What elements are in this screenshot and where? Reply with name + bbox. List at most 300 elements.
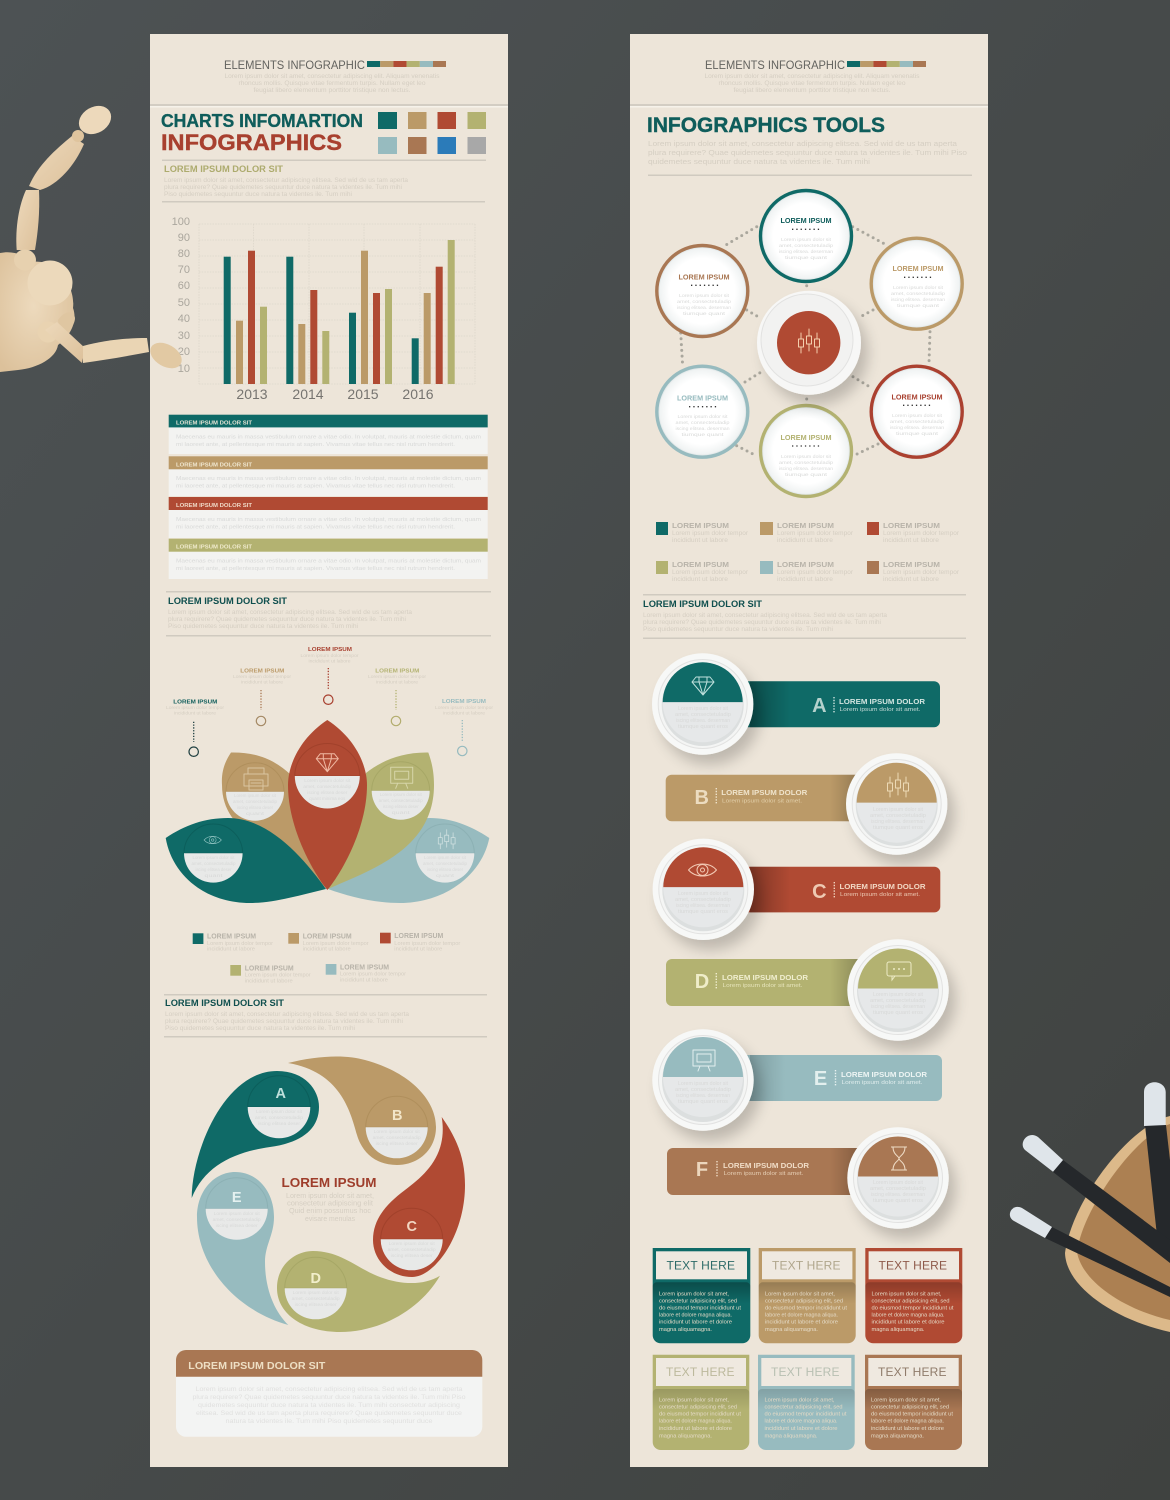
section heading: lotus: plura requirere? Quae quidemetes sequuntur duce natura ta videntes ile. Tum mihi — [168, 617, 406, 623]
hexagon legend: Lorem ipsum dolor tempor — [777, 570, 853, 576]
lotus legend: incididunt ut labore — [245, 978, 293, 984]
row A: tiumque quant eros — [678, 724, 729, 730]
text box: brown: do eiusmod tempor incididunt ut — [871, 1412, 953, 1418]
circle: light blue — [657, 366, 748, 457]
hexagon legend: incididunt ut labore — [883, 577, 940, 583]
bar chart: 100 — [172, 216, 190, 228]
text box: red — [865, 1248, 962, 1343]
text box: brown: incididunt ut labore et dolore — [871, 1426, 944, 1432]
petal text: amet, consectetuladip — [303, 784, 352, 789]
swirl chart — [192, 1056, 465, 1332]
lotus legend — [193, 933, 461, 984]
text box: brown: consectetur adipisicing elit, sed — [871, 1405, 949, 1411]
swirl segment E — [197, 1172, 288, 1325]
hexagon legend: Lorem ipsum dolor tempor — [883, 570, 959, 576]
hexagon legend: Lorem ipsum dolor tempor — [672, 531, 748, 537]
bar chart: 2016 — [402, 386, 434, 402]
bar chart: 20 — [178, 346, 190, 358]
circle: red: LOREM IPSUM — [892, 392, 942, 402]
bar chart: 60 — [178, 280, 190, 292]
text box: tan — [759, 1248, 856, 1343]
intro text block: LOREM IPSUM DOLOR SIT — [164, 164, 284, 174]
bar chart: 2014 — [292, 386, 324, 402]
text box: teal: do eiusmod tempor incididunt ut — [659, 1306, 741, 1312]
row A: LOREM IPSUM DOLOR — [839, 697, 926, 706]
row D: D — [695, 971, 709, 993]
lotus labels and pointers — [166, 647, 493, 756]
petal text: Lorem ipsum dolor sit — [424, 855, 467, 860]
circle: teal: LOREM IPSUM — [780, 216, 832, 225]
text box: brown: magna aliquamagna. — [871, 1433, 924, 1439]
petal text: amet, consectetuladip — [379, 798, 423, 803]
circle: olive: iscing elitsea. deserman — [779, 466, 833, 472]
row B: tiumque quant eros — [873, 825, 924, 831]
row D — [666, 939, 949, 1041]
section heading: rows: LOREM IPSUM DOLOR SIT — [643, 599, 762, 610]
circle: teal: Lorem ipsum dolor sit — [781, 237, 832, 243]
colour text bars: LOREM IPSUM DOLOR SIT — [176, 420, 253, 426]
wooden mannequin — [0, 100, 186, 374]
callout box: quidemetes sequuntur duce natura ta videntes ile. Tum mihi consectetur adipiscing — [198, 1402, 461, 1409]
row D: tiumque quant eros — [873, 1010, 924, 1016]
circle: olive — [760, 406, 852, 496]
swirl segment C: Lorem ipsum dolor sit — [389, 1241, 435, 1246]
row C: C — [812, 881, 827, 903]
colour text bars — [169, 415, 488, 579]
swirl segment D — [277, 1251, 440, 1332]
row C: tiumque quant eros — [678, 909, 729, 915]
colour text bars: Maecenas eu mauris in massa vestibulum ornare a vitae odio. In volutpat, mauris at molestie dictum, quam — [176, 558, 481, 564]
poster header: feugiat libero elementum porttitor tristique non lectus. — [734, 88, 891, 94]
swirl segment A: Lorem ipsum dolor sit — [256, 1109, 303, 1114]
row C: amet, consectetuladip — [675, 897, 731, 903]
row E: Lorem ipsum dolor sit amet. — [842, 1080, 923, 1086]
row B: iscing elitsea. deserman — [871, 819, 925, 825]
hexagon legend: LOREM IPSUM — [883, 523, 940, 530]
row E — [652, 1029, 942, 1131]
circle: brown: amet, consectetuladip — [677, 299, 731, 305]
bar chart: 2015 — [347, 386, 379, 402]
title: CHARTS INFOMARTION — [161, 111, 363, 131]
lotus labels and pointers: LOREM IPSUM — [375, 668, 419, 674]
text box: light blue: incididunt ut labore et dolore — [764, 1426, 838, 1432]
row E: tiumque quant eros — [678, 1099, 729, 1105]
section heading: lotus: LOREM IPSUM DOLOR SIT — [168, 596, 287, 607]
swirl segment D: Lorem ipsum dolor sit — [293, 1290, 339, 1295]
row E: amet, consectetuladip — [675, 1087, 731, 1093]
petal text: iscing elitsea deser — [427, 867, 463, 872]
title: plura requirere? Quae quidemetes sequuntur duce natura ta videntes ile. Tum mihi Piso — [648, 148, 967, 157]
text box: light blue: labore et dolore magna aliqua. — [764, 1419, 838, 1425]
bar chart: 30 — [178, 330, 190, 342]
row B — [666, 753, 947, 855]
lotus labels and pointers: incididunt ut labore — [308, 658, 351, 664]
lotus labels and pointers: Lorem ipsum dolor tempor — [368, 674, 426, 680]
lotus labels and pointers: LOREM IPSUM — [308, 647, 352, 653]
lotus legend: incididunt ut labore — [340, 978, 388, 984]
swirl segment E: Lorem ipsum dolor sit — [214, 1211, 260, 1216]
poster header: rhoncus mollis. Quisque vitae fermentum turpis. Nullam eget leo — [238, 81, 426, 87]
swirl segment A: iscing elitsea deser — [258, 1121, 301, 1126]
swirl segment B: B — [392, 1108, 403, 1124]
row B: B — [694, 787, 709, 809]
colour text bars: mi laoreet ante, at pellentesque mi mauris at sapien. Vivamus vitae tellus nec nisl rutrum hendrerit. — [176, 524, 456, 530]
row F — [667, 1127, 949, 1229]
circle: teal: iscing elitsea. deserman — [779, 249, 833, 255]
bar chart: 70 — [178, 264, 190, 276]
row E: iscing elitsea. deserman — [676, 1093, 730, 1099]
swirl segment A: A — [275, 1086, 286, 1102]
colour text bars: Maecenas eu mauris in massa vestibulum ornare a vitae odio. In volutpat, mauris at molestie dictum, quam — [176, 517, 481, 523]
row F: Lorem ipsum dolor sit — [873, 1180, 924, 1186]
colour text bars: LOREM IPSUM DOLOR SIT — [176, 545, 253, 551]
petal text: Lorem ipsum dolor sit — [192, 855, 235, 860]
section heading: rows: plura requirere? Quae quidemetes sequuntur duce natura ta videntes ile. Tum mihi — [643, 620, 881, 626]
bar chart: 2013 — [236, 386, 268, 402]
lotus labels and pointers: LOREM IPSUM — [240, 668, 284, 674]
colour text bars: LOREM IPSUM DOLOR SIT — [176, 503, 253, 509]
circle: olive: Lorem ipsum dolor sit — [781, 454, 832, 460]
row E: E — [814, 1068, 827, 1090]
text box: light blue: do eiusmod tempor incididunt ut — [764, 1412, 847, 1418]
circle: light blue: iscing elitsea. deserman — [676, 426, 730, 432]
circle: tan: amet, consectetuladip — [891, 291, 945, 297]
row A: Lorem ipsum dolor sit amet. — [840, 707, 921, 713]
swirl segment C: iscing elitsea deser — [391, 1253, 433, 1258]
poster header: ELEMENTS INFOGRAPHIC — [705, 58, 845, 72]
petal text: amet, consectetuladip — [192, 861, 236, 866]
text box: teal: TEXT HERE — [666, 1258, 736, 1272]
bar chart: 90 — [178, 232, 190, 244]
hexagon legend: LOREM IPSUM — [672, 523, 729, 530]
circle: tan: tiumque quant — [897, 303, 940, 309]
swirl segment D: amet, consectetuladip — [292, 1296, 340, 1301]
circle: red: tiumque quant — [896, 431, 939, 437]
petal text: Lorem ipsum dolor sit — [234, 793, 277, 798]
panel: right poster — [630, 34, 988, 1467]
swirl segment E: E — [232, 1190, 242, 1206]
circle: brown: iscing elitsea. deserman — [677, 305, 731, 311]
bar chart: 10 — [178, 363, 190, 375]
pencil — [1144, 1082, 1170, 1245]
callout box: elitsea. Sed wid de us tam aperta plura requirere? Quae quidemetes sequuntur duce — [196, 1410, 463, 1417]
hexagon legend — [656, 522, 959, 583]
hexagon legend: incididunt ut labore — [672, 538, 729, 544]
hexagon legend: Lorem ipsum dolor tempor — [777, 531, 853, 537]
pencil — [1023, 1135, 1170, 1263]
callout box: plura requirere? Quae quidemetes sequuntur duce natura ta videntes ile. Tum mihi Piso — [192, 1394, 466, 1401]
petal text: iscing elitsea deser — [196, 867, 232, 872]
lotus labels and pointers: Lorem ipsum dolor tempor — [166, 705, 224, 711]
section heading: swirl: Lorem ipsum dolor sit amet, consectetur adipiscing elitsea. Sed wid de us tam aperta — [165, 1012, 410, 1018]
text box: teal: consectetur adipisicing elit, sed — [659, 1298, 737, 1304]
petal text: iscing elitsea deser — [237, 805, 273, 810]
circle: red: iscing elitsea. deserman — [890, 425, 944, 431]
petal: red — [288, 720, 367, 890]
text box: teal: labore et dolore magna aliqua. — [659, 1313, 732, 1319]
bar chart: 80 — [178, 248, 190, 260]
circle: red — [871, 366, 962, 457]
poster header: feugiat libero elementum porttitor tristique non lectus. — [254, 88, 411, 94]
lotus legend: LOREM IPSUM — [394, 933, 443, 940]
swirl segment B — [288, 1056, 436, 1165]
text box: red: incididunt ut labore et dolore — [872, 1320, 944, 1326]
colour text bars: mi laoreet ante, at pellentesque mi mauris at sapien. Vivamus vitae tellus nec nisl rutrum hendrerit. — [176, 566, 456, 572]
section heading: rows — [643, 594, 966, 639]
hexagon legend: LOREM IPSUM — [883, 562, 940, 569]
text box: light blue: TEXT HERE — [771, 1365, 841, 1379]
text box: teal: magna aliquamagna. — [659, 1327, 712, 1333]
circle: brown: Lorem ipsum dolor sit — [679, 293, 730, 299]
lotus labels and pointers: incididunt ut labore — [174, 710, 216, 716]
colour text bars: mi laoreet ante, at pellentesque mi mauris at sapien. Vivamus vitae tellus nec nisl rutrum hendrerit. — [176, 442, 456, 448]
text box: red: magna aliquamagna. — [872, 1327, 925, 1333]
circle: light blue: tiumque quant — [682, 432, 724, 438]
text box: tan: consectetur adipisicing elit, sed — [765, 1298, 843, 1304]
lotus legend: incididunt ut labore — [207, 946, 255, 952]
petal text: Lorem ipsum dolor sit — [380, 792, 422, 797]
callout box: Lorem ipsum dolor sit amet, consectetur adipiscing elitsea. Sed wid de us tam aperta — [196, 1386, 463, 1393]
text box: red: labore et dolore magna aliqua. — [872, 1313, 945, 1319]
text box: light blue: Lorem ipsum dolor sit amet, — [764, 1398, 835, 1404]
text box: tan: do eiusmod tempor incididunt ut — [765, 1306, 847, 1312]
text box: tan: magna aliquamagna. — [765, 1327, 818, 1333]
row C — [653, 839, 940, 940]
circle: brown: tiumque quant — [683, 311, 726, 317]
row B: Lorem ipsum dolor sit — [873, 807, 924, 813]
swirl segment B: Lorem ipsum dolor sit — [374, 1129, 420, 1134]
hexagon legend: Lorem ipsum dolor tempor — [672, 570, 748, 576]
section heading: swirl: LOREM IPSUM DOLOR SIT — [165, 998, 284, 1009]
hexagon legend: incididunt ut labore — [883, 538, 940, 544]
circle: light blue: LOREM IPSUM — [677, 394, 728, 402]
pencil — [1010, 1207, 1170, 1297]
lotus legend: Lorem ipsum dolor tempor — [340, 972, 406, 978]
lotus legend: Lorem ipsum dolor tempor — [207, 941, 273, 947]
swirl centre text: LOREM IPSUM — [282, 1175, 376, 1190]
circle: light blue: amet, consectetuladip — [676, 420, 730, 426]
row B: Lorem ipsum dolor sit amet. — [722, 798, 802, 804]
lotus chart — [166, 720, 489, 903]
callout box — [176, 1350, 482, 1437]
row D: iscing elitsea. deserman — [871, 1004, 925, 1010]
text box: red: do eiusmod tempor incididunt ut — [872, 1306, 954, 1312]
bar chart: 50 — [178, 297, 190, 309]
petal text: quant — [246, 811, 265, 816]
section heading: rows: Lorem ipsum dolor sit amet, consectetur adipiscing elitsea. Sed wid de us tam aperta — [643, 613, 888, 619]
text box: tan: labore et dolore magna aliqua. — [765, 1313, 838, 1319]
swirl segment E: iscing elitsea deser — [216, 1223, 258, 1228]
circle: teal: amet, consectetuladip — [779, 243, 833, 249]
bar chart: 40 — [178, 313, 190, 325]
lotus labels and pointers: Lorem ipsum dolor tempor — [233, 674, 291, 680]
circle: light blue: Lorem ipsum dolor sit — [678, 414, 728, 420]
row C: Lorem ipsum dolor sit amet. — [840, 892, 920, 898]
text box: teal: Lorem ipsum dolor sit amet, — [659, 1291, 729, 1297]
title: quidemetes sequuntur duce natura ta videntes ile. Tum mihi — [648, 157, 870, 166]
lotus legend: LOREM IPSUM — [303, 934, 352, 940]
poster header: rhoncus mollis. Quisque vitae fermentum turpis. Nullam eget leo — [718, 81, 906, 87]
row F: amet, consectetuladip — [870, 1186, 926, 1192]
hexagon legend: LOREM IPSUM — [672, 562, 729, 569]
petal text: quant — [436, 873, 455, 878]
lotus legend: Lorem ipsum dolor tempor — [303, 941, 369, 947]
swirl segment C: C — [406, 1219, 417, 1235]
section heading: lotus: Piso quidemetes sequuntur duce natura ta videntes ile. Tum mihi — [168, 624, 358, 630]
circle: brown: LOREM IPSUM — [678, 272, 730, 282]
poster header — [630, 58, 988, 108]
lotus legend: Lorem ipsum dolor tempor — [394, 941, 461, 947]
circle: olive: tiumque quant — [785, 472, 828, 478]
circle: red: Lorem ipsum dolor sit — [892, 413, 943, 419]
hexagon legend: LOREM IPSUM — [777, 562, 834, 569]
text box: tan: TEXT HERE — [772, 1258, 842, 1272]
text box: red: TEXT HERE — [878, 1258, 948, 1272]
circle: teal: tiumque quant — [785, 255, 828, 261]
row A: A — [812, 695, 827, 717]
text box: teal: incididunt ut labore et dolore — [659, 1320, 732, 1326]
callout box: natura ta videntes ile. Tum mihi Piso quidemetes sequuntur duce — [226, 1418, 433, 1425]
lotus legend: LOREM IPSUM — [245, 965, 294, 972]
petal text: quant minima eos — [309, 796, 346, 801]
title: INFOGRAPHICS — [161, 130, 342, 155]
text box: tan: Lorem ipsum dolor sit amet, — [765, 1291, 835, 1297]
petal text — [192, 778, 467, 878]
panel: left poster — [150, 34, 508, 1467]
row D: Lorem ipsum dolor sit amet. — [722, 983, 803, 989]
lotus legend: LOREM IPSUM — [340, 964, 389, 971]
row F: tiumque quant eros — [873, 1198, 924, 1204]
poster header — [150, 58, 508, 108]
text box: olive: magna aliquamagna. — [659, 1433, 712, 1439]
swirl segment D: D — [310, 1271, 321, 1287]
intro text block: Lorem ipsum dolor sit amet, consectetur adipiscing elitsea. Sed wid de us tam aperta — [164, 178, 409, 184]
petal: olive — [328, 752, 434, 889]
lotus labels and pointers: Lorem ipsum dolor tempor — [300, 653, 359, 659]
colour text bars: Maecenas eu mauris in massa vestibulum ornare a vitae odio. In volutpat, mauris at molestie dictum, quam — [176, 476, 481, 482]
row F: F — [696, 1159, 708, 1181]
bar chart — [172, 216, 475, 402]
petal text: quant — [392, 810, 411, 815]
lotus labels and pointers: incididunt ut labore — [241, 680, 283, 686]
row A: iscing elitsea. deserman — [676, 718, 730, 724]
petal text: amet, consectetuladip — [233, 799, 277, 804]
row C: LOREM IPSUM DOLOR — [840, 882, 926, 891]
text box: brown: labore et dolore magna aliqua. — [871, 1419, 944, 1425]
row A — [652, 653, 940, 755]
text box: red: consectetur adipisicing elit, sed — [872, 1298, 950, 1304]
row B: amet, consectetuladip — [870, 813, 926, 819]
swirl segment C — [373, 1117, 465, 1277]
row B: LOREM IPSUM DOLOR — [721, 788, 808, 797]
text box: tan: incididunt ut labore et dolore — [765, 1320, 838, 1326]
petal text: quant — [204, 873, 224, 878]
intro text block: plura requirere? Quae quidemetes sequuntur duce natura ta videntes ile. Tum mihi — [164, 185, 402, 191]
row D: LOREM IPSUM DOLOR — [722, 973, 809, 982]
circle: red: amet, consectetuladip — [890, 419, 944, 425]
row A: amet, consectetuladip — [675, 712, 731, 718]
row E: Lorem ipsum dolor sit — [678, 1081, 729, 1087]
circle: tan — [871, 238, 962, 329]
row C: iscing elitsea. deserman — [676, 903, 730, 909]
title: INFOGRAPHICS TOOLS — [647, 114, 885, 137]
row D: amet, consectetuladip — [870, 998, 926, 1004]
title — [647, 114, 972, 176]
row C: Lorem ipsum dolor sit — [678, 891, 729, 897]
section heading: swirl: Piso quidemetes sequuntur duce natura ta videntes ile. Tum mihi — [165, 1026, 355, 1032]
title: Lorem ipsum dolor sit amet, consectetur adipiscing elitsea. Sed wid de us tam aperta — [648, 139, 958, 148]
hexagon legend: Lorem ipsum dolor tempor — [883, 531, 959, 537]
lotus labels and pointers: incididunt ut labore — [443, 710, 485, 716]
lotus labels and pointers: incididunt ut labore — [376, 680, 418, 686]
row F: Lorem ipsum dolor sit amet. — [724, 1171, 804, 1177]
text box: teal — [653, 1248, 750, 1343]
lotus labels and pointers: Lorem ipsum dolor tempor — [435, 705, 493, 711]
intro text block — [162, 160, 486, 202]
colour text bars: mi laoreet ante, at pellentesque mi mauris at sapien. Vivamus vitae tellus nec nisl rutrum hendrerit. — [176, 484, 456, 490]
text box: light blue: magna aliquamagna. — [764, 1433, 818, 1439]
text box: olive: incididunt ut labore et dolore — [659, 1426, 732, 1432]
swirl centre text: Quid enim possumus hoc — [289, 1208, 372, 1215]
hexagon legend: incididunt ut labore — [672, 577, 729, 583]
circle: olive: LOREM IPSUM — [780, 433, 832, 442]
hexagon legend: LOREM IPSUM — [777, 523, 834, 530]
row F: LOREM IPSUM DOLOR — [723, 1161, 810, 1170]
poster header: Lorem ipsum dolor sit amet, consectetur adipiscing elit. Aliquam venenatis — [224, 74, 440, 80]
section heading: lotus — [166, 591, 491, 636]
lotus labels and pointers: LOREM IPSUM — [442, 699, 486, 705]
swirl segment A — [192, 1071, 319, 1198]
text box: olive: TEXT HERE — [666, 1365, 736, 1379]
colour swatches — [378, 112, 486, 154]
swirl centre text: evisare menulas — [305, 1216, 355, 1223]
lotus legend: incididunt ut labore — [394, 946, 443, 952]
wooden bowl with pencils — [1010, 1082, 1170, 1332]
swirl segment E: amet, consectetuladip — [213, 1217, 261, 1222]
centre hub — [757, 291, 861, 395]
swirl segment C: amet, consectetuladip — [388, 1247, 436, 1252]
petal text: iscing elitsea deser — [383, 804, 419, 809]
text box: olive: Lorem ipsum dolor sit amet, — [659, 1398, 729, 1404]
hexagon legend: incididunt ut labore — [777, 538, 834, 544]
text box: red: Lorem ipsum dolor sit amet, — [872, 1291, 942, 1297]
colour text bars: Maecenas eu mauris in massa vestibulum ornare a vitae odio. In volutpat, mauris at molestie dictum, quam — [176, 434, 481, 440]
dotted connectors — [681, 227, 930, 456]
section heading: lotus: Lorem ipsum dolor sit amet, consectetur adipiscing elitsea. Sed wid de us tam aperta — [168, 610, 413, 616]
text box: olive — [653, 1355, 749, 1450]
text box: olive: do eiusmod tempor incididunt ut — [659, 1412, 741, 1418]
section heading: swirl — [164, 994, 487, 1038]
swirl centre text: Lorem ipsum dolor sit amet, — [286, 1193, 374, 1200]
text box: light blue — [758, 1355, 855, 1450]
circle: olive: amet, consectetuladip — [779, 460, 833, 466]
petal text: iscing elitsea deser — [307, 790, 348, 795]
swirl centre text: consectetur adipiscing elit — [287, 1200, 373, 1208]
petal text: Lorem ipsum dolor sit — [304, 778, 351, 783]
swirl centre text — [282, 1175, 376, 1223]
swirl segment B: amet, consectetuladip — [373, 1135, 421, 1140]
section heading: rows: Piso quidemetes sequuntur duce natura ta videntes ile. Tum mihi — [643, 627, 833, 633]
petal: tan — [222, 752, 327, 889]
text box: light blue: consectetur adipisicing elit, sed — [764, 1405, 842, 1411]
section heading: swirl: plura requirere? Quae quidemetes sequuntur duce natura ta videntes ile. Tum mihi — [165, 1019, 403, 1025]
swirl segment A: amet, consectetuladip — [255, 1115, 304, 1120]
callout box: LOREM IPSUM DOLOR SIT — [188, 1361, 325, 1372]
colour text bars: LOREM IPSUM DOLOR SIT — [176, 462, 253, 468]
intro text block: Piso quidemetes sequuntur duce natura ta videntes ile. Tum mihi — [164, 192, 352, 198]
swirl segment D: iscing elitsea deser — [295, 1302, 337, 1307]
row F: iscing elitsea. deserman — [871, 1192, 925, 1198]
